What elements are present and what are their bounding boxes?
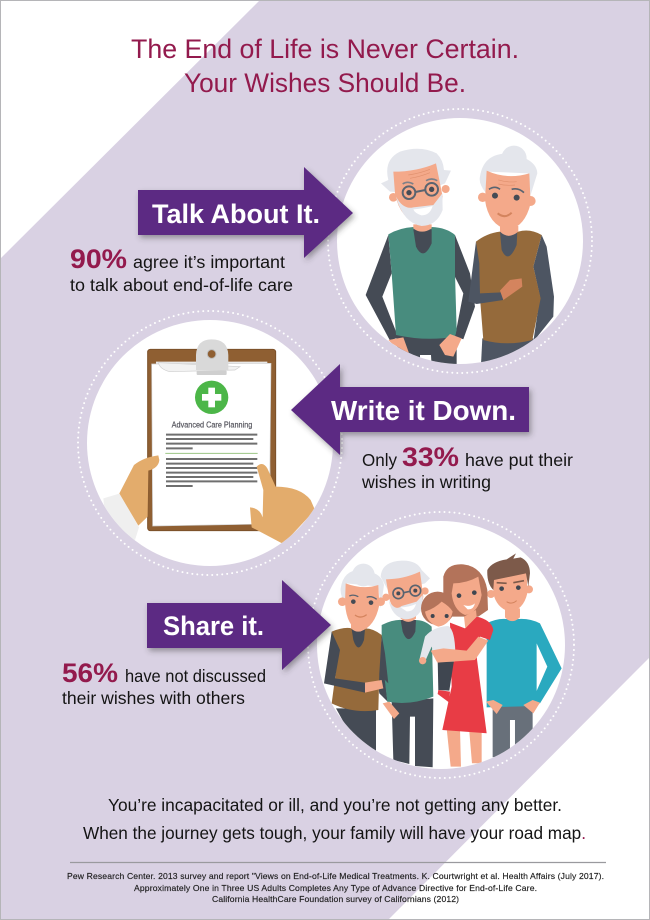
closing statement: When the journey gets tough, your family will have your road map. [83, 823, 586, 843]
sources: California HealthCare Foundation survey of Californians (2012) [212, 894, 459, 904]
grandpa [377, 561, 433, 767]
text block: 90% [70, 244, 293, 295]
illustration: clipboard with hands [103, 339, 315, 544]
text block: 33%: wishes in writing [361, 472, 491, 492]
panel: circle two [78, 311, 342, 575]
text block: 90%: agree it’s important [133, 252, 285, 272]
sources: Pew Research Center. 2013 survey and report "Views on End-of-Life Medical Treatments. K. Courtwright et al. Health Affairs (July 2017). [67, 871, 604, 881]
clipboard: Advanced Care Planning [172, 420, 253, 430]
text block: 56%: have not discussed [125, 666, 266, 686]
arrow: write it down [291, 364, 529, 455]
illustration: older couple [366, 146, 554, 367]
left hand [103, 455, 159, 540]
sources: Approximately One in Three US Adults Completes Any Type of Advance Directive for End-of-Life Care. [134, 883, 537, 893]
arrow: talk about it [138, 167, 353, 258]
panel: circle one [328, 109, 592, 373]
title [131, 34, 519, 98]
text block: 33%: Only [362, 450, 397, 470]
arrow: write it down: Write it Down. [331, 395, 516, 426]
baby [419, 592, 455, 703]
grandma [324, 564, 388, 751]
text block: 56%: 56% [62, 658, 118, 688]
mom's arm [431, 637, 488, 663]
clipboard [148, 339, 276, 531]
arrow: share it [147, 580, 331, 670]
mom [442, 564, 493, 767]
sources [67, 871, 604, 904]
dad [486, 553, 562, 757]
woman [468, 146, 554, 365]
illustration: family [324, 553, 562, 767]
panel: circle three [308, 512, 574, 778]
arrow: share it: Share it. [163, 611, 264, 641]
text block: 90%: to talk about end-of-life care [70, 275, 293, 295]
text block: 33%: have put their [465, 450, 573, 470]
title: Your Wishes Should Be. [184, 68, 466, 98]
closing statement [83, 795, 586, 843]
title: The End of Life is Never Certain. [131, 34, 519, 64]
man [366, 149, 475, 367]
text block: 33%: 33% [402, 442, 459, 472]
text block: 56% [62, 658, 266, 708]
icon: green plus [195, 381, 228, 414]
closing statement: You’re incapacitated or ill, and you’re not getting any better. [108, 795, 562, 815]
right hand [250, 464, 315, 544]
text block: 90%: 90% [70, 244, 127, 274]
text block: 56%: their wishes with others [62, 688, 245, 708]
text block: 33% [361, 442, 573, 492]
arrow: talk about it: Talk About It. [152, 199, 320, 229]
